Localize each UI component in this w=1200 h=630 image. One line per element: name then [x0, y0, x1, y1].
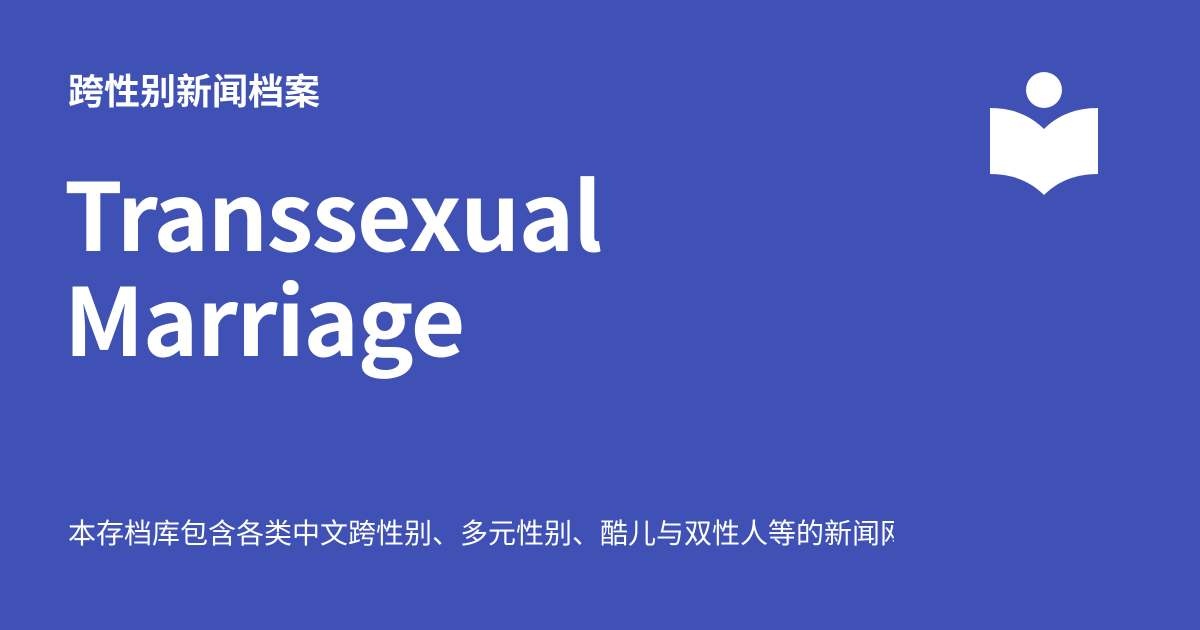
- icon: reader with open book: [990, 72, 1098, 195]
- title: [64, 143, 601, 384]
- title: Marriage: [64, 248, 464, 384]
- title: Transsexual: [64, 143, 601, 279]
- site name: 跨性别新闻档案: [68, 63, 320, 115]
